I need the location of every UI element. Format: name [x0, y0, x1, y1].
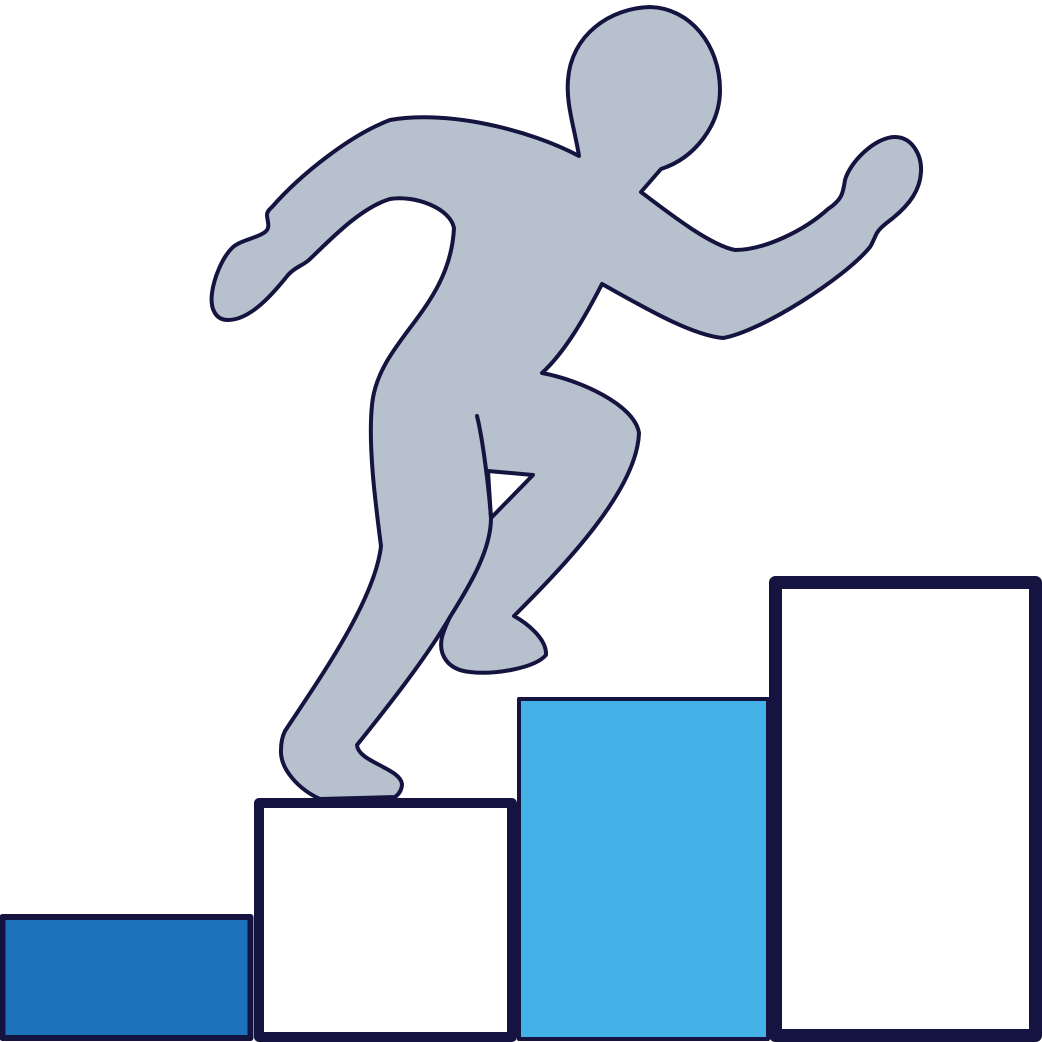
- bar 3: light blue step: [519, 699, 768, 1039]
- gap between the legs: [488, 471, 533, 518]
- inner leg contour: [450, 416, 491, 617]
- bar 2: white step: [259, 803, 512, 1037]
- bar 1: dark blue step: [2, 917, 250, 1038]
- figure: running person: [212, 7, 921, 799]
- body silhouette: [212, 7, 921, 799]
- bar 4: tall white step: [776, 582, 1036, 1036]
